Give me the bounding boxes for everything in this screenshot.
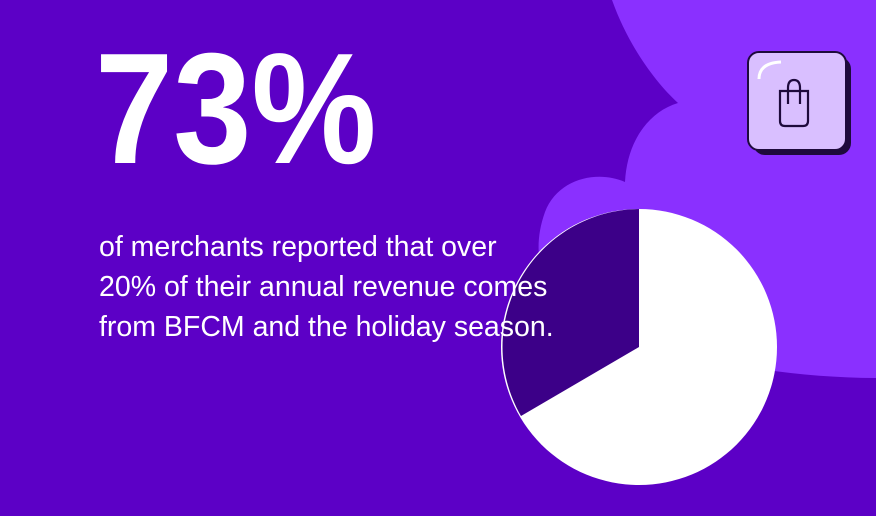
pie chart <box>501 209 777 485</box>
body text: 20% of their annual revenue comes <box>99 271 547 303</box>
body text: of merchants reported that over <box>99 231 497 263</box>
cloud shape <box>539 0 876 378</box>
icon: shopping bag key <box>747 51 851 155</box>
headline: 73%: 73% <box>95 21 376 197</box>
body text <box>99 231 554 343</box>
body text: from BFCM and the holiday season. <box>99 311 554 343</box>
